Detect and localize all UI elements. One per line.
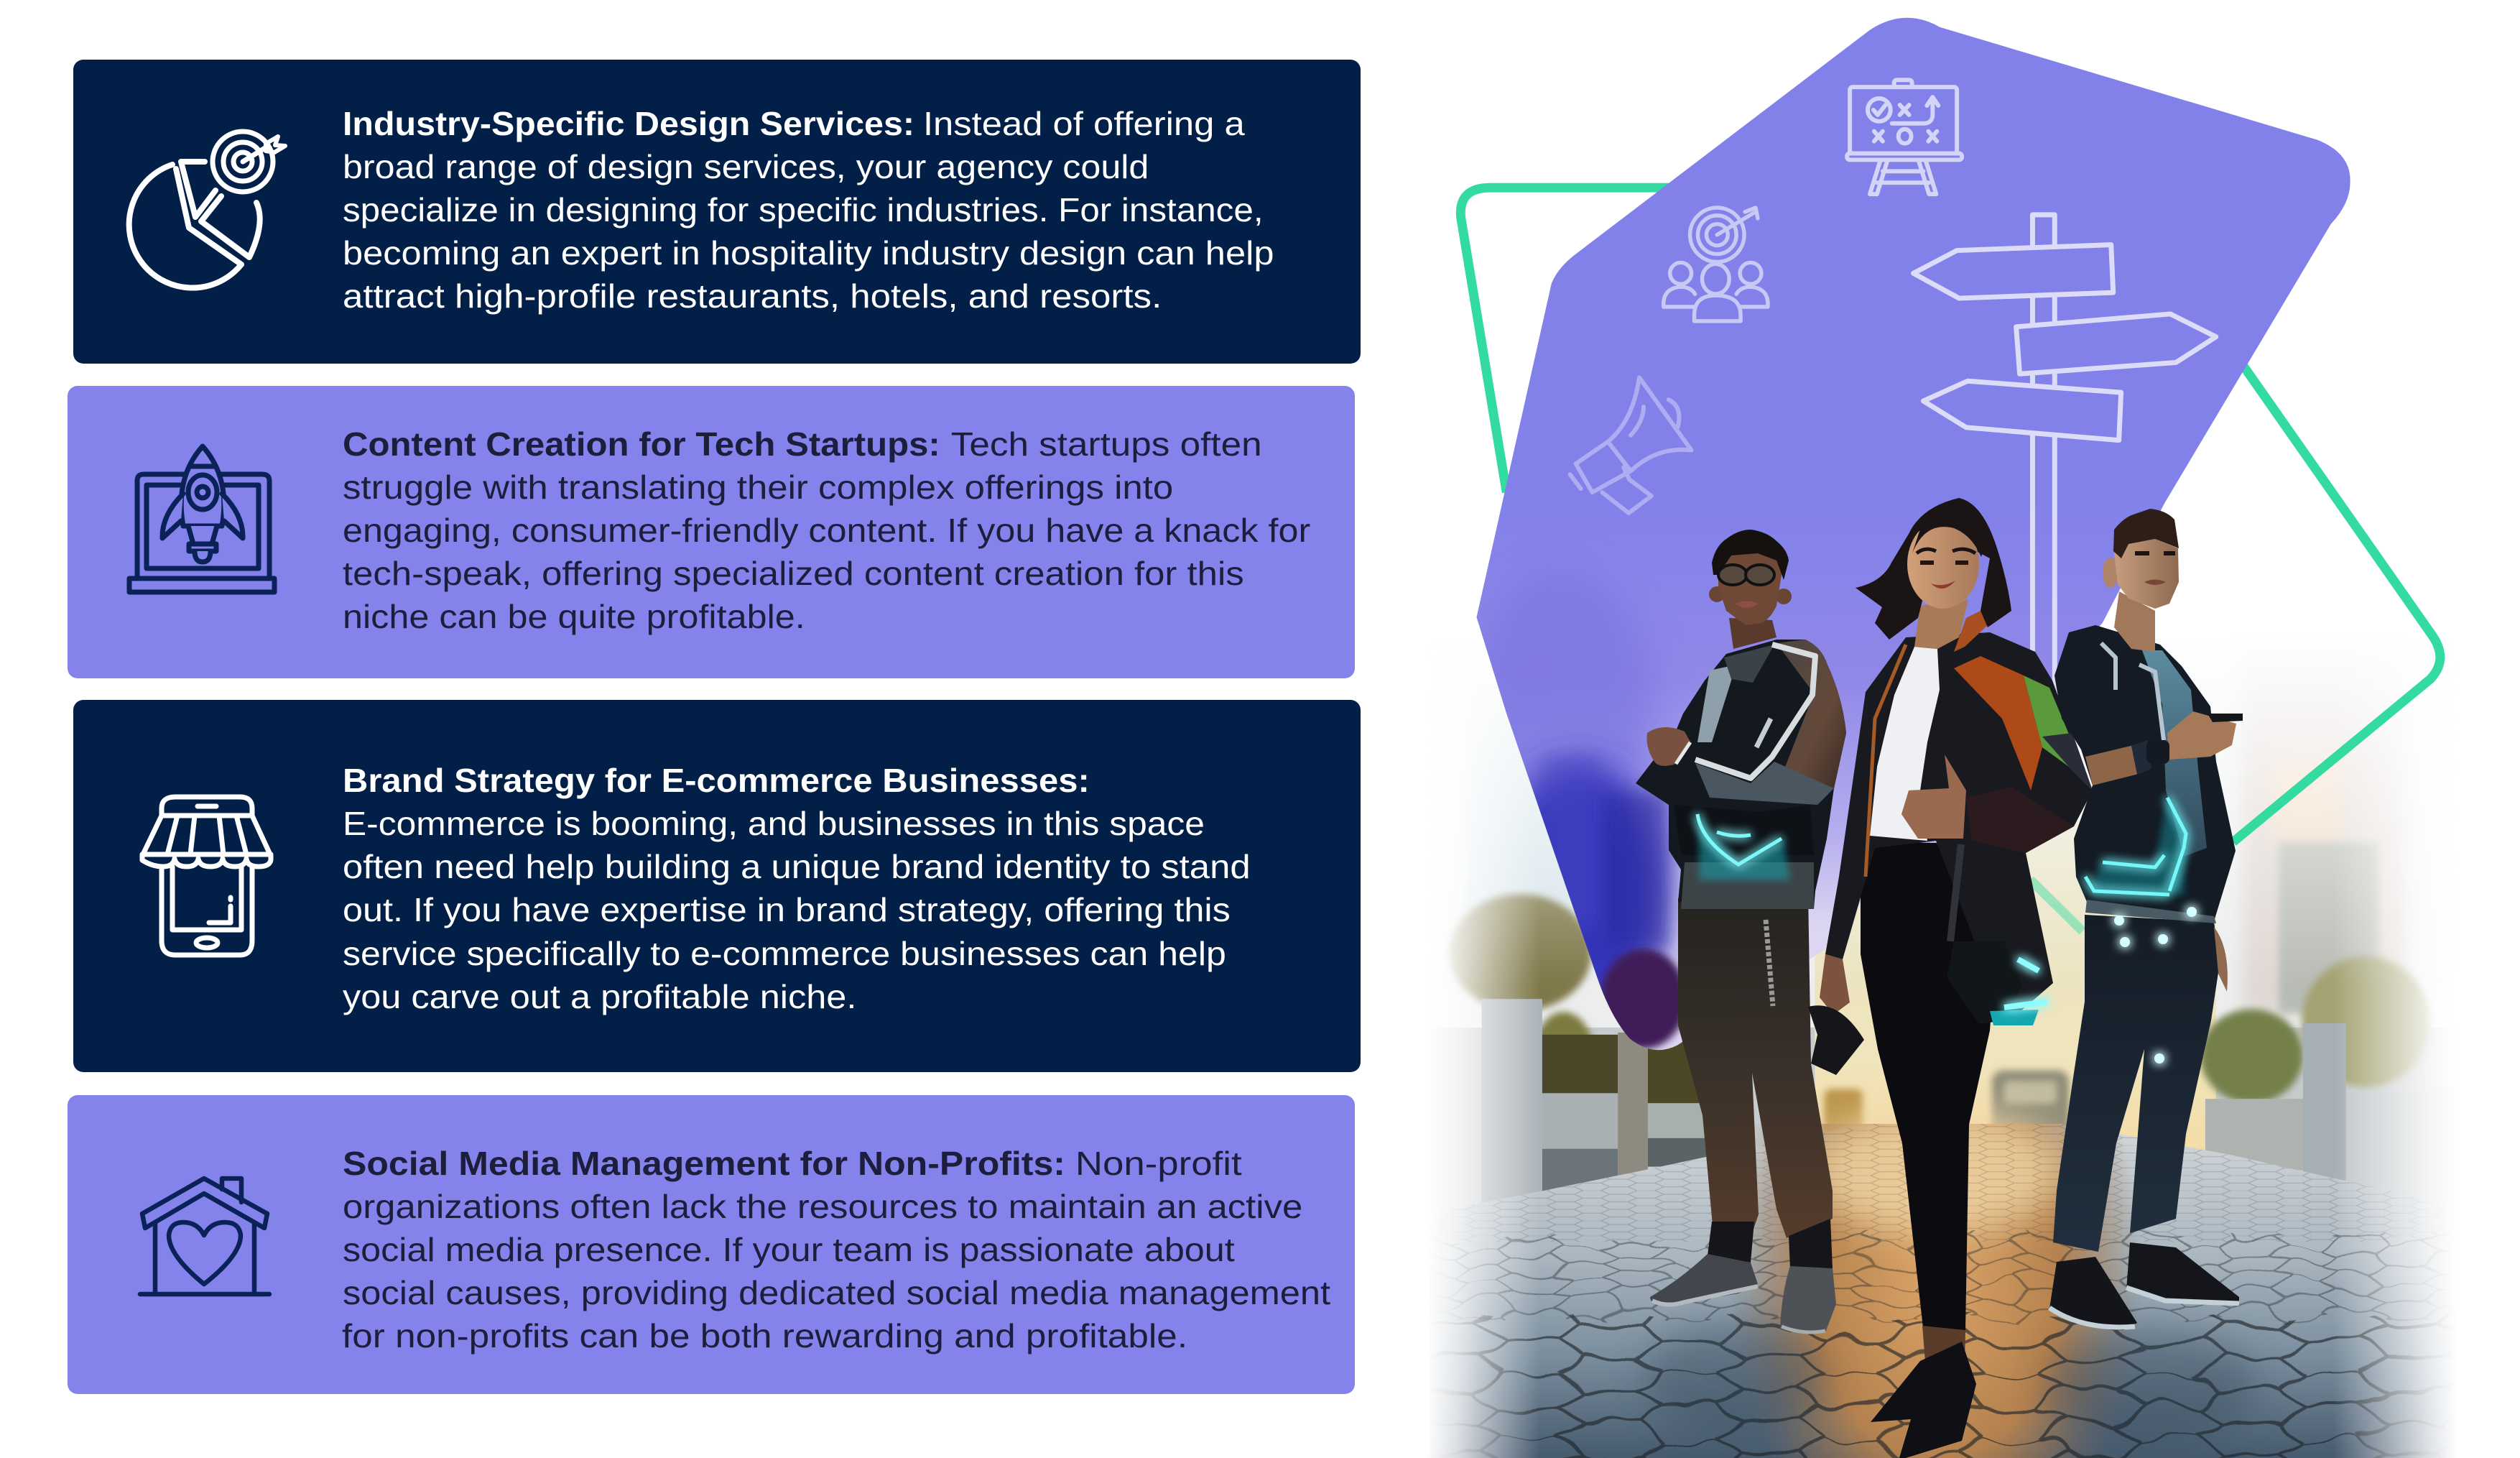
icon: strategy board [1847,80,1962,194]
signpost [1914,215,2216,714]
person: right man with phone [2049,509,2243,1330]
text: card 4: for non-profits can be both rewarding and profitable. [342,1317,1187,1355]
icon: pie chart and target [129,132,285,288]
text: card 2 [343,425,1310,635]
city overlay in purple shape [1469,571,1687,1049]
icon: target and audience [1664,208,1768,321]
icon: rocket on laptop [129,446,274,592]
text: card 1: becoming an expert in hospitality industry design can help [343,234,1274,272]
card 3: Brand Strategy for E-commerce Businesses [73,700,1361,1072]
text: card 2: Content Creation for Tech Startups: [343,425,940,463]
text: card 3: often need help building a unique brand identity to stand [343,848,1251,885]
text: card 2: struggle with translating their complex offerings into [343,469,1173,506]
text: card 4: social causes, providing dedicated social media management [343,1274,1330,1311]
hero artwork backdrop [1408,18,2478,1458]
text: card 3: out. If you have expertise in brand strategy, offering this [343,891,1231,928]
text: card 3: Brand Strategy for E-commerce Businesses: [343,762,1090,799]
text: card 3: service specifically to e-commerce businesses can help [343,935,1226,972]
person: left man with glasses [1636,530,1846,1334]
text: card 2: tech-speak, offering specialized content creation for this [343,555,1244,592]
text: card 3: E-commerce is booming, and businesses in this space [343,805,1205,842]
background scene: city street with cobblestones [1432,696,2451,1458]
icon: house with heart [140,1178,269,1294]
card 2: Content Creation for Tech Startups [68,386,1355,678]
text: card 2: Tech startups often [951,425,1262,463]
text: card 4 [342,1145,1330,1355]
text: card 2: niche can be quite profitable. [343,598,805,635]
people [1636,498,2243,1458]
text: card 1: Instead of offering a [923,105,1245,142]
card 4: Social Media Management for Non-Profits [68,1095,1355,1394]
text: card 1: attract high-profile restaurants, hotels, and resorts. [343,277,1162,315]
text: card 1: specialize in designing for specific industries. For instance, [343,191,1264,229]
card 1: Industry-Specific Design Services [73,60,1361,364]
text: card 2: engaging, consumer-friendly content. If you have a knack for [343,512,1310,549]
green outline frame [1460,188,2440,931]
text: card 1: Industry-Specific Design Services: [343,105,914,142]
text: card 4: organizations often lack the resources to maintain an active [343,1188,1302,1225]
text: card 4: Non-profit [1075,1145,1242,1182]
icon: megaphone [1570,377,1692,513]
person: woman in the middle [1808,498,2093,1458]
icon: shop on phone [142,797,271,955]
text: card 4: social media presence. If your team is passionate about [343,1231,1235,1268]
text: card 3 [343,762,1251,1015]
text: card 3: you carve out a profitable niche. [343,978,856,1015]
text: card 1: broad range of design services, your agency could [343,148,1149,185]
text: card 1 [343,105,1274,315]
text: card 4: Social Media Management for Non-Profits: [343,1145,1065,1182]
purple hexagon backdrop [1477,18,2350,1050]
